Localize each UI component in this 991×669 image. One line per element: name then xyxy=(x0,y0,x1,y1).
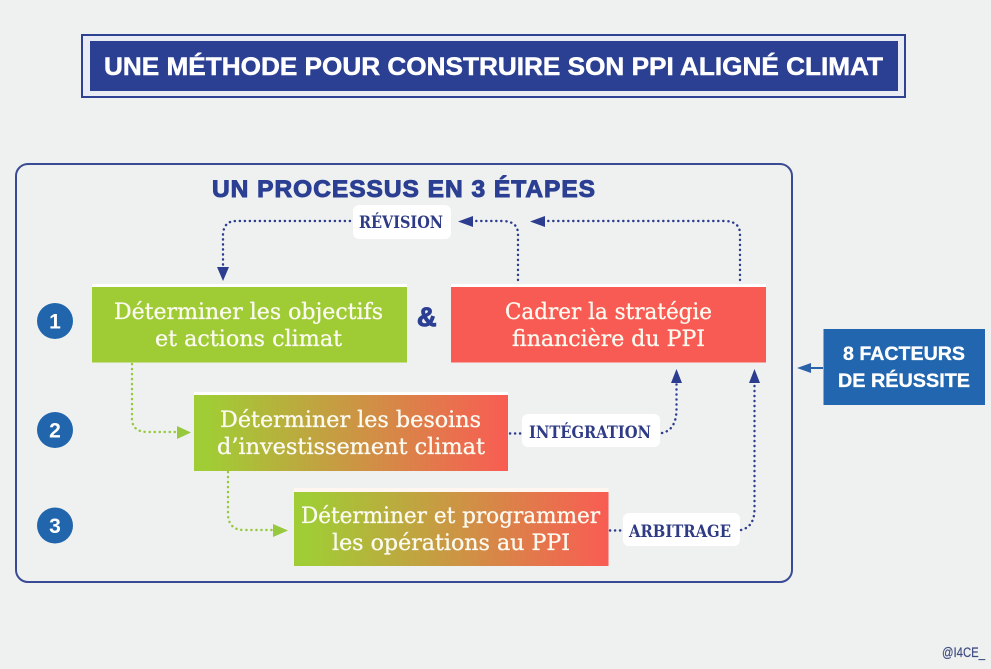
arrow: stratégie to révision xyxy=(458,216,518,280)
step 2 box: besoins: d’investissement climat xyxy=(217,435,485,460)
title banner: UNE MÉTHODE POUR CONSTRUIRE SON PPI ALIGNÉ CLIMAT xyxy=(104,52,883,81)
arrow: arbitrage connector xyxy=(610,529,623,532)
panel: success factors xyxy=(824,329,985,405)
label: intégration: INTÉGRATION xyxy=(529,422,651,443)
step 3 box: opérations: les opérations au PPI xyxy=(332,531,570,556)
step 2 box: besoins: Déterminer les besoins xyxy=(220,408,481,433)
step 1 box: stratégie financière xyxy=(451,284,766,362)
label: intégration xyxy=(522,414,660,447)
step 3 box: opérations: Déterminer et programmer xyxy=(301,504,600,529)
step 1 box: objectifs: et actions climat xyxy=(155,327,342,352)
step 3 box: opérations xyxy=(294,488,608,566)
step 3 number xyxy=(37,508,73,544)
arrow: intégration to stratégie xyxy=(662,369,682,433)
arrow: integration connector xyxy=(510,432,522,435)
arrow: green step 1 to step 2 xyxy=(132,364,191,439)
arrow: arbitrage to stratégie xyxy=(741,369,760,530)
step 1 number xyxy=(37,303,73,339)
step 2 box: besoins xyxy=(194,392,508,471)
step 1 number: 1 xyxy=(49,310,61,334)
panel: process frame xyxy=(16,164,792,582)
label: révision xyxy=(353,205,451,239)
arrow: stratégie to révision long xyxy=(530,216,740,280)
title banner xyxy=(82,35,905,97)
step 3 number: 3 xyxy=(49,515,61,538)
ampersand: & xyxy=(417,302,436,332)
heading: process: UN PROCESSUS EN 3 ÉTAPES xyxy=(212,175,595,203)
panel: success factors: DE RÉUSSITE xyxy=(838,370,970,392)
label: révision: RÉVISION xyxy=(359,212,443,233)
step 1 box: objectifs xyxy=(92,284,407,362)
step 2 number xyxy=(37,412,73,448)
label: arbitrage: ARBITRAGE xyxy=(628,522,731,542)
step 1 box: objectifs: Déterminer les objectifs xyxy=(114,300,383,325)
label: arbitrage xyxy=(623,513,740,546)
arrow: factors to panel xyxy=(797,363,823,373)
step 1 box: stratégie financière: Cadrer la stratégie xyxy=(505,300,712,325)
step 2 number: 2 xyxy=(49,420,61,442)
arrow: révision to step 1 xyxy=(217,221,350,281)
step 1 box: stratégie financière: financière du PPI xyxy=(512,327,705,352)
panel: success factors: 8 FACTEURS xyxy=(843,344,965,365)
arrow: green step 2 to step 3 xyxy=(228,472,288,537)
